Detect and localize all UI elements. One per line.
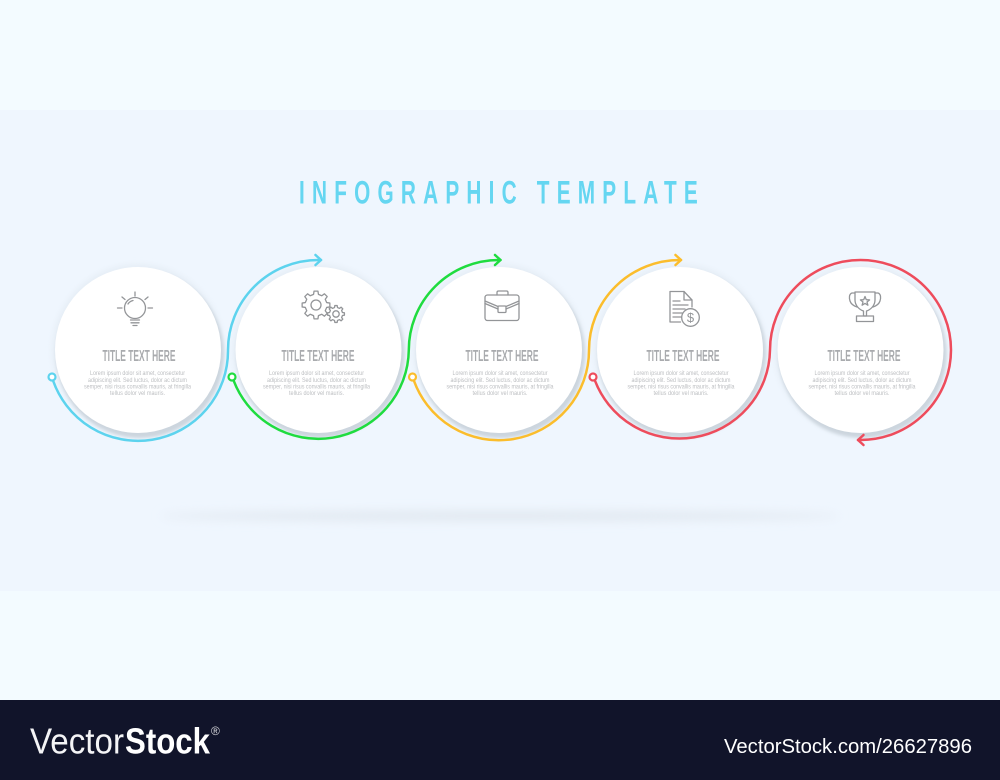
step 4 text [628, 348, 735, 397]
ground shadow [160, 511, 840, 521]
step 1 text: Lorem ipsum dolor sit amet, consectetur [90, 371, 185, 377]
icon: gears [302, 291, 344, 322]
step 3 text: semper, nisi risus convallis mauris, at fringilla [446, 384, 554, 390]
arrow: red connector [590, 260, 951, 445]
step 2 text: semper, nisi risus convallis mauris, at fringilla [263, 384, 371, 390]
footer logo: Stock [125, 720, 211, 762]
icon: document with dollar [670, 292, 699, 326]
icon: briefcase [485, 291, 519, 320]
step 1 text: tellus dolor vel mauris. [110, 391, 165, 397]
step 3 text: adipiscing elit. Sed luctus, dolor ac dictum [450, 378, 550, 384]
step 3 text [446, 348, 554, 397]
step 4 text: adipiscing elit. Sed luctus, dolor ac dictum [632, 378, 731, 384]
arrow: green connector [228, 255, 500, 439]
step 4 text: semper, nisi risus convallis mauris, at fringilla [628, 384, 735, 390]
step 2 text: TITLE TEXT HERE [282, 348, 355, 365]
step 4 text: TITLE TEXT HERE [646, 348, 720, 365]
background band [0, 110, 1000, 591]
step 4 disc [594, 264, 766, 438]
step 3 text: Lorem ipsum dolor sit amet, consectetur [452, 371, 548, 377]
step 5 text [808, 348, 916, 397]
step 2 disc [232, 264, 404, 438]
step 2 text: adipiscing elit. Sed luctus, dolor ac dictum [267, 378, 366, 384]
step 2 text: tellus dolor vel mauris. [289, 391, 344, 397]
footer id: VectorStock.com/26627896 [724, 736, 972, 758]
step 2 text [263, 348, 371, 397]
step 1 text [84, 348, 192, 397]
step 2 text: Lorem ipsum dolor sit amet, consectetur [269, 371, 364, 377]
step 4 text: Lorem ipsum dolor sit amet, consectetur [634, 371, 728, 377]
title: INFOGRAPHIC TEMPLATE [299, 174, 698, 211]
arrow: yellow connector [409, 255, 681, 440]
footer logo [30, 720, 220, 762]
step 5 text: adipiscing elit. Sed luctus, dolor ac dictum [812, 378, 912, 384]
step 5 text: TITLE TEXT HERE [828, 348, 901, 365]
icon: document with dollar: $ [687, 310, 695, 325]
step 3 disc [413, 264, 585, 438]
footer logo: Vector [30, 720, 124, 762]
arrow: cyan connector [48, 255, 321, 441]
step 5 text: semper, nisi risus convallis mauris, at fringilla [808, 384, 916, 390]
step 5 text: Lorem ipsum dolor sit amet, consectetur [814, 371, 910, 377]
icon: light bulb [118, 292, 152, 326]
step 5 text: tellus dolor vel mauris. [834, 391, 890, 397]
footer logo: ® [211, 724, 220, 738]
step 3 text: tellus dolor vel mauris. [472, 391, 528, 397]
step 1 text: semper, nisi risus convallis mauris, at fringilla [84, 384, 192, 390]
step 1 text: TITLE TEXT HERE [102, 348, 176, 365]
icon: trophy [849, 292, 881, 322]
step 4 text: tellus dolor vel mauris. [654, 391, 709, 397]
footer bar [0, 700, 1000, 780]
step 3 text: TITLE TEXT HERE [466, 348, 539, 365]
step 1 disc [52, 264, 224, 438]
step 1 text: adipiscing elit. Sed luctus, dolor ac dictum [88, 378, 187, 384]
step 5 disc [774, 264, 946, 438]
